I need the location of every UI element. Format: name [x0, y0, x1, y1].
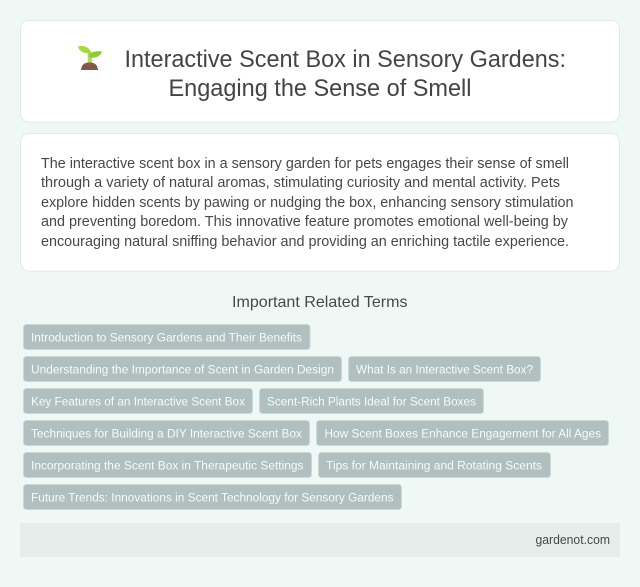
- panel: related term chips: [24, 324, 608, 510]
- chip: therapeutic settings: [24, 452, 312, 478]
- description text: and preventing boredom. This innovative feature promotes emotional well-being by: [41, 213, 568, 230]
- chip: introduction: Introduction to Sensory Gardens and Their Benefits: [31, 330, 302, 344]
- title: Engaging the Sense of Smell: [168, 75, 472, 102]
- chip: scent-rich plants: [260, 388, 484, 414]
- panel: title card: [20, 20, 620, 122]
- footer: gardenot.com: [536, 533, 610, 547]
- icon: seedling: [78, 46, 102, 70]
- chip: therapeutic settings: Incorporating the Scent Box in Therapeutic Settings: [31, 458, 304, 472]
- chip: importance of scent: [24, 356, 342, 382]
- chip: maintenance tips: [318, 452, 550, 478]
- description text: [41, 155, 574, 250]
- chip: diy techniques: Techniques for Building a DIY Interactive Scent Box: [31, 426, 303, 440]
- chip: future trends: Future Trends: Innovations in Scent Technology for Sensory Gardens: [31, 490, 394, 504]
- title: Interactive Scent Box in Sensory Gardens:: [124, 46, 566, 73]
- chip: future trends: [24, 484, 402, 510]
- chip: maintenance tips: Tips for Maintaining and Rotating Scents: [326, 458, 542, 472]
- chip: engagement: [316, 420, 608, 446]
- panel: description card: [20, 134, 620, 271]
- description text: explore hidden scents by pawing or nudging the box, enhancing sensory stimulation: [41, 194, 574, 211]
- chip: engagement: How Scent Boxes Enhance Engagement for All Ages: [324, 426, 601, 440]
- description text: The interactive scent box in a sensory garden for pets engages their sense of smell: [41, 155, 569, 172]
- chip: key features: [24, 388, 252, 414]
- chip: key features: Key Features of an Interactive Scent Box: [31, 394, 246, 408]
- chip: diy techniques: [24, 420, 310, 446]
- chip: importance of scent: Understanding the Importance of Scent in Garden Design: [31, 362, 334, 376]
- description text: encouraging natural sniffing behavior and providing an enriching tactile experience.: [41, 233, 569, 250]
- description text: through a variety of natural aromas, stimulating curiosity and mental activity. Pets: [41, 174, 560, 191]
- chip: scent-rich plants: Scent-Rich Plants Ideal for Scent Boxes: [267, 394, 476, 408]
- heading: important related terms: Important Related Terms: [232, 294, 408, 311]
- title: [124, 46, 566, 102]
- footer: [20, 523, 620, 557]
- chip: what is a scent box: What Is an Interactive Scent Box?: [356, 362, 533, 376]
- chip: introduction: [24, 324, 310, 350]
- chip: what is a scent box: [348, 356, 540, 382]
